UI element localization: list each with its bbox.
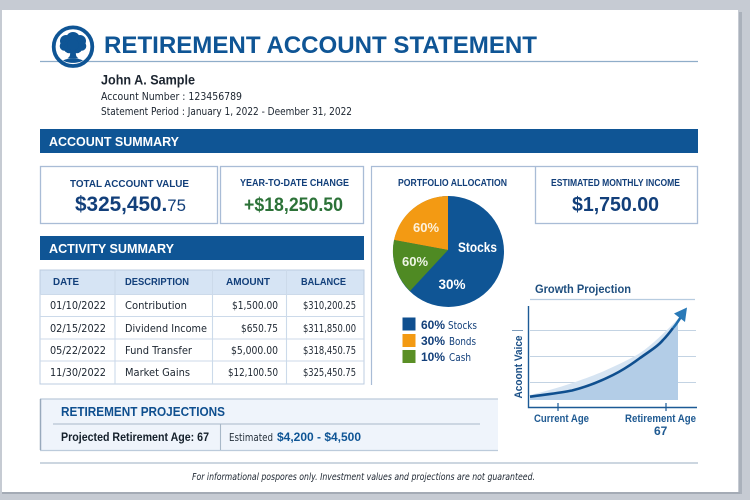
table row 3: $318,450.75 — [303, 345, 356, 357]
table row 4: $12,100.50 — [228, 367, 278, 379]
table row 2 — [50, 323, 356, 335]
table header — [53, 276, 346, 288]
heading: activity summary: ACTIVITY SUMMARY — [49, 241, 174, 256]
activity table — [40, 270, 364, 384]
panel: year-to-date change — [220, 166, 364, 224]
pie chart: Stocks — [458, 239, 497, 255]
panel: year-to-date change: YEAR-TO-DATE CHANGE — [240, 177, 349, 189]
table row 3 — [50, 345, 356, 357]
x axis labels — [534, 413, 696, 438]
table header: BALANCE — [301, 276, 346, 288]
panel: estimated monthly income — [536, 166, 698, 224]
table row 1 — [50, 300, 356, 312]
estimated income range — [229, 432, 361, 444]
heading: retirement projections: RETIREMENT PROJECTIONS — [61, 405, 225, 419]
legend: 30% — [421, 334, 445, 348]
panel: retirement projections — [40, 399, 498, 450]
panel: total account value: TOTAL ACCOUNT VALUE — [70, 178, 189, 190]
heading: account summary — [40, 129, 698, 153]
legend — [402, 318, 477, 364]
table row 3: $5,000.00 — [231, 345, 278, 357]
title: RETIREMENT ACCOUNT STATEMENT — [104, 32, 537, 59]
legend: Cash — [449, 352, 471, 364]
projected retirement age: Projected Retirement Age: 67 — [61, 432, 209, 444]
account holder details — [101, 72, 352, 118]
table row 2: $311,850.00 — [303, 323, 356, 335]
account holder details: John A. Sample — [101, 72, 195, 88]
chart: growth projection — [512, 282, 697, 438]
x axis labels: 67 — [654, 424, 668, 438]
panel: year-to-date change: +$18,250.50 — [244, 195, 343, 216]
panel: estimated monthly income: $1,750.00 — [572, 194, 659, 216]
table header: AMOUNT — [226, 276, 271, 288]
table row 3: Fund Transfer — [125, 345, 193, 357]
table row 2: $650.75 — [241, 323, 278, 335]
heading: account summary: ACCOUNT SUMMARY — [49, 134, 179, 149]
table row 1: Contribution — [125, 300, 187, 312]
table row 1: $1,500.00 — [232, 300, 278, 312]
pie chart — [393, 196, 504, 307]
legend: 10% — [421, 350, 445, 364]
table row 4: $325,450.75 — [303, 367, 356, 379]
pie chart: 60% — [402, 254, 428, 269]
account holder details: Statement Period : January 1, 2022 - Deember 31, 2022 — [101, 106, 352, 118]
table row 4: Market Gains — [125, 367, 190, 379]
legend: Stocks — [448, 320, 477, 332]
axis label: Acoont Vaice — [513, 336, 525, 398]
x axis labels: Retirement Age — [625, 413, 696, 425]
icon: tree logo — [54, 27, 92, 66]
panel: estimated monthly income: ESTIMATED MONTHLY INCOME — [551, 177, 680, 189]
table row 3: 05/22/2022 — [50, 345, 106, 357]
growth curve arrow — [530, 308, 687, 397]
pie chart: 60% — [413, 220, 439, 235]
shaded area — [530, 319, 678, 400]
x axis labels: Current Age — [534, 413, 589, 425]
estimated income range: $4,200 - $4,500 — [277, 432, 361, 444]
legend: Bonds — [449, 336, 476, 348]
pie chart: 30% — [438, 277, 466, 292]
axes — [528, 306, 697, 408]
table row 1: 01/10/2022 — [50, 300, 106, 312]
panel: total account value — [40, 166, 218, 224]
heading: portfolio allocation: PORTFOLIO ALLOCATION — [398, 177, 507, 189]
heading: activity summary — [40, 236, 364, 260]
table row 1: $310,200.25 — [303, 300, 356, 312]
footer disclaimer: For informational pospores only. Investment values and projections are not guaranteed. — [192, 472, 535, 483]
panel: portfolio allocation — [372, 166, 535, 385]
estimated income range: Estimated — [229, 432, 273, 444]
account holder details: Account Number : 123456789 — [101, 91, 242, 103]
table row 2: 02/15/2022 — [50, 323, 106, 335]
table row 2: Dividend Income — [125, 323, 207, 335]
legend: 60% — [421, 318, 445, 332]
table header: DATE — [53, 276, 79, 288]
table header: DESCRIPTION — [125, 276, 189, 288]
heading: growth projection: Growth Projection — [535, 282, 631, 296]
table row 4: 11/30/2022 — [50, 367, 106, 379]
panel: total account value: $325,450.75 — [75, 193, 186, 216]
table row 4 — [50, 367, 356, 379]
